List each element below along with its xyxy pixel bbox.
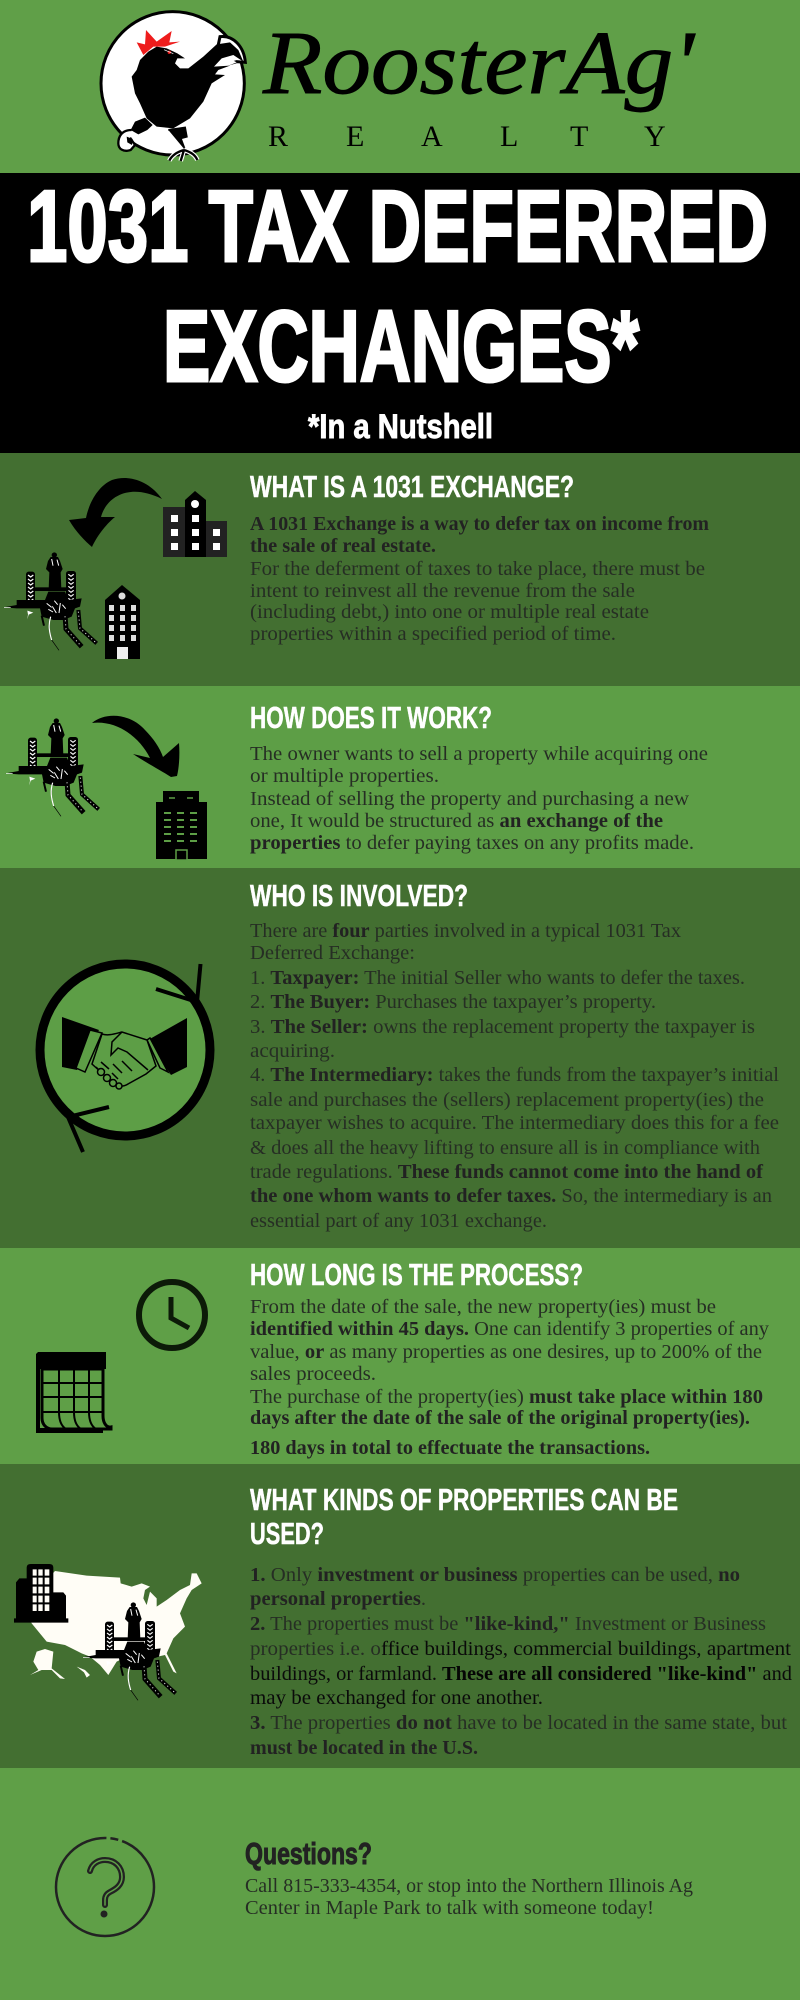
body text: or multiple properties. [250, 765, 439, 787]
icon: rooster emblem [101, 12, 245, 161]
body text: 4. The Intermediary: takes the funds from the taxpayer’s initial [250, 1064, 779, 1086]
icon: question mark [56, 1838, 154, 1936]
body text: 1. Only investment or business properties can be used, no [250, 1564, 740, 1586]
body text [250, 1564, 792, 1759]
body text [250, 920, 779, 1232]
body text: the one whom wants to defer taxes. So, the intermediary is an [250, 1185, 772, 1207]
subtitle: *In a Nutshell [308, 408, 493, 446]
icon: tractor [3, 552, 97, 650]
heading [250, 1482, 678, 1551]
icon: apartment building [105, 585, 140, 659]
body text: personal properties . [250, 1588, 426, 1610]
icon: tractor [5, 718, 99, 816]
body text: From the date of the sale, the new property(ies) must be [250, 1296, 716, 1318]
icon: office building [14, 1564, 68, 1623]
body text: Center in Maple Park to talk with someone today! [245, 1897, 654, 1919]
body text: 1. Taxpayer: The initial Seller who wants to defer the taxes. [250, 967, 745, 989]
icon: clock [139, 1282, 205, 1348]
body text: The owner wants to sell a property while acquiring one [250, 743, 708, 765]
body text [245, 1875, 693, 1919]
body text: acquiring. [250, 1040, 335, 1062]
body text: the sale of real estate. [250, 535, 436, 557]
body text: may be exchanged for one another. [250, 1687, 543, 1709]
body text: days after the date of the sale of the original property(ies). [250, 1407, 750, 1429]
panel: what is a 1031 exchange [0, 453, 800, 686]
body text: properties within a specified period of time. [250, 623, 616, 645]
body text: taxpayer wishes to acquire. The intermediary does this for a fee [250, 1112, 779, 1134]
body text: 2. The Buyer: Purchases the taxpayer’s property. [250, 991, 656, 1013]
icon: office tower [156, 791, 207, 860]
icon: curved arrow [92, 716, 179, 777]
heading: USED? [250, 1516, 324, 1551]
body text: identified within 45 days. One can identify 3 properties of any [250, 1318, 769, 1340]
body text: intent to reinvest all the revenue from the sale [250, 580, 635, 602]
body text: & does all the heavy lifting to ensure all is in compliance with [250, 1137, 760, 1159]
heading: Questions? [245, 1836, 372, 1871]
body text: properties to defer paying taxes on any profits made. [250, 832, 694, 854]
wordmark: RoosterAg' [262, 14, 696, 113]
realty subtitle: REALTY [268, 120, 666, 153]
body text: 180 days in total to effectuate the transactions. [250, 1437, 650, 1459]
body text: sale and purchases the (sellers) replacement property(ies) the [250, 1089, 764, 1111]
body text: properties i.e. o ffice buildings, commercial buildings, apartment [250, 1638, 791, 1660]
body text: Call 815-333-4354, or stop into the Northern Illinois Ag [245, 1875, 693, 1897]
body text: one, It would be structured as an exchange of the [250, 810, 663, 832]
body text: must be located in the U.S. [250, 1737, 478, 1759]
body text: The purchase of the property(ies) must take place within 180 [250, 1386, 763, 1408]
body text: value, or as many properties as one desires, up to 200% of the [250, 1341, 762, 1363]
body text: trade regulations. These funds cannot come into the hand of [250, 1161, 763, 1183]
body text: sales proceeds. [250, 1363, 376, 1385]
panel: logo header [0, 0, 800, 173]
icon: city buildings [163, 491, 227, 557]
icon: tractor [82, 1602, 176, 1700]
body text: Deferred Exchange: [250, 942, 415, 964]
body text [250, 1296, 769, 1459]
body text [250, 513, 709, 645]
panel: questions footer [0, 1768, 800, 2000]
body text: 3. The Seller: owns the replacement property the taxpayer is [250, 1016, 755, 1038]
body text: (including debt,) into one or multiple real estate [250, 601, 649, 623]
body text: buildings, or farmland. These are all considered "like-kind" and [250, 1663, 792, 1685]
body text: For the deferment of taxes to take place, there must be [250, 558, 705, 580]
panel: who is involved [0, 868, 800, 1248]
body text: essential part of any 1031 exchange. [250, 1210, 547, 1232]
icon: curved arrow [69, 478, 162, 547]
body text: 3. The properties do not have to be located in the same state, but [250, 1712, 787, 1734]
panel: title banner [0, 171, 800, 453]
panel: how long is the process [0, 1248, 800, 1464]
heading: HOW LONG IS THE PROCESS? [250, 1257, 583, 1292]
body text: There are four parties involved in a typical 1031 Tax [250, 920, 681, 942]
panel: what kinds of properties [0, 1464, 800, 1768]
body text: A 1031 Exchange is a way to defer tax on income from [250, 513, 709, 535]
panel: how does it work [0, 686, 800, 868]
heading: WHAT IS A 1031 EXCHANGE? [250, 469, 574, 504]
icon: handshake in circle [40, 964, 210, 1152]
icon: calendar [36, 1352, 111, 1433]
icon: US map [23, 1571, 202, 1679]
body text: Instead of selling the property and purchasing a new [250, 788, 690, 810]
heading: WHO IS INVOLVED? [250, 878, 468, 913]
body text: 2. The properties must be "like-kind," Investment or Business [250, 1613, 766, 1635]
heading: HOW DOES IT WORK? [250, 700, 492, 735]
body text [250, 743, 708, 854]
